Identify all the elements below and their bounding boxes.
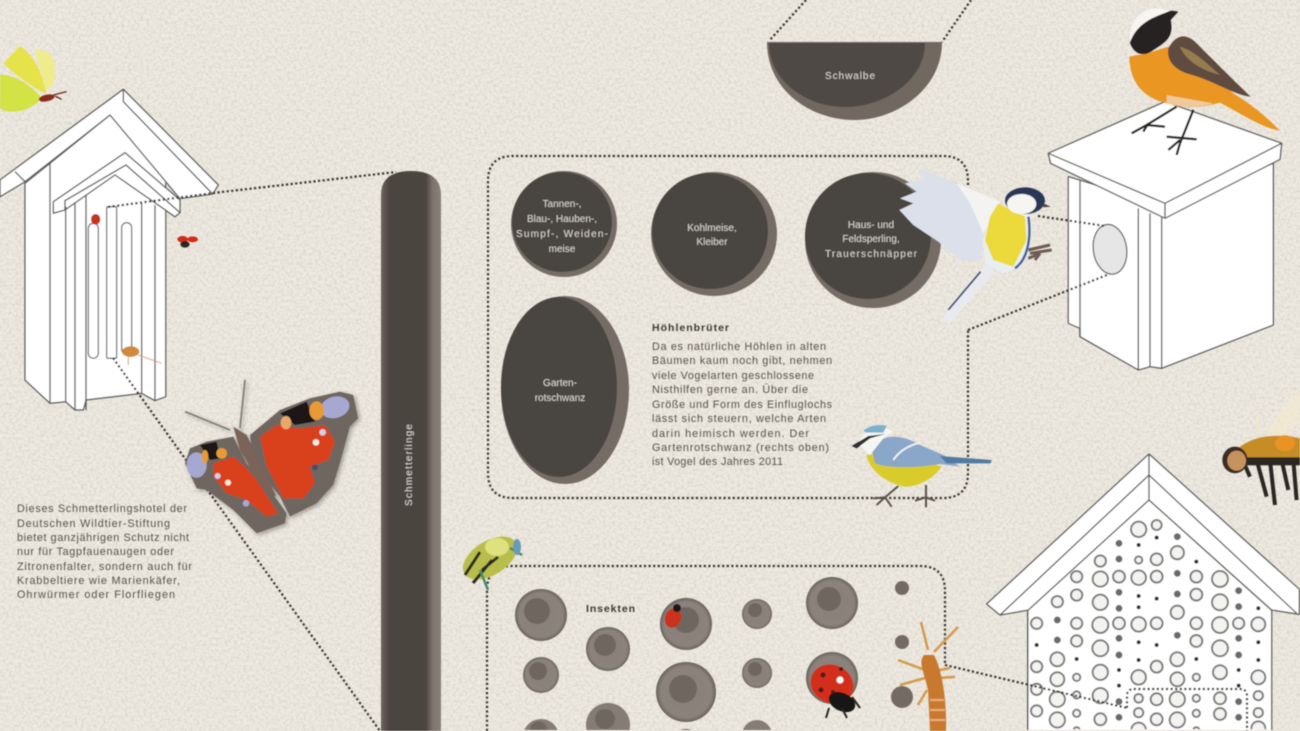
dotted inset rectangle on insect hotel: [1127, 689, 1247, 731]
text block: butterfly hotel description: nur für Tagpfauenaugen oder: [17, 546, 174, 558]
text block: Höhlenbrüter: ist Vogel des Jahres 2011: [652, 456, 783, 468]
hole: Kohlmeise: Kleiber: [696, 237, 728, 248]
label: Schmetterlinge: Schmetterlinge: [404, 424, 415, 506]
hole: Kohlmeise: Kohlmeise,: [687, 223, 737, 234]
icon: bumblebee: [1222, 392, 1300, 505]
dotted connector: nest box hole: [968, 216, 1107, 330]
hole: Tannenmeise etc: Tannen-,: [543, 199, 581, 210]
icon: great tit: [899, 168, 1052, 325]
icon: yellow wild bee: [456, 528, 524, 590]
icon: orange bug on hotel: [122, 346, 162, 365]
hole: Tannenmeise etc: Sumpf-, Weiden-: [516, 229, 608, 240]
hole: Kohlmeise: [651, 172, 777, 296]
hole: Tannenmeise etc: Blau-, Hauben-,: [527, 214, 597, 225]
text block: butterfly hotel description: Deutschen Wildtier-Stiftung: [17, 518, 170, 530]
hole: Haussperling etc: Trauerschnäpper: [825, 249, 918, 260]
icon: redstart: [1129, 8, 1280, 155]
text block: butterfly hotel description: Zitronenfalter, sondern auch für: [17, 561, 192, 573]
dotted connector: insect panel to hotel: [945, 665, 1127, 708]
text block: butterfly hotel description: Dieses Schmetterlingshotel der: [17, 503, 187, 515]
hole: Gartenrotschwanz: Garten-: [543, 378, 577, 389]
swallow nest hole: [767, 42, 942, 120]
icon: blue tit: [852, 425, 992, 507]
icon: earwig insect: [898, 622, 958, 731]
small bore dots: [1054, 533, 1242, 721]
hole: Tannenmeise etc: [511, 171, 617, 277]
hole: Gartenrotschwanz: rotschwanz: [535, 393, 585, 404]
panel: cavity nesters dotted outline: [488, 156, 968, 498]
text block: Höhlenbrüter: lässt sich steuern, welche Arten: [652, 413, 826, 425]
icon: large ladybird: [804, 657, 860, 718]
text block: butterfly hotel description: Krabbeltiere wie Marienkäfer,: [17, 575, 180, 587]
icon: small red bug on hotel: [91, 214, 100, 225]
text block: butterfly hotel description: [17, 503, 192, 601]
hole: Haussperling etc: Haus- und: [848, 220, 894, 231]
insect panel dotted outline: [487, 566, 945, 731]
icon: peacock butterfly: [185, 380, 358, 533]
hole: Tannenmeise etc: meise: [549, 244, 576, 255]
text block: butterfly hotel description: bietet ganzjährigen Schutz nicht: [17, 532, 189, 544]
dotted connector: swallow nest: [769, 0, 971, 42]
heading: Insekten: Insekten: [586, 603, 635, 615]
entrance hole: [1090, 222, 1130, 276]
text block: Höhlenbrüter: Gartenrotschwanz (rechts oben): [652, 442, 829, 454]
nest box drawing: [1048, 102, 1282, 370]
text block: Höhlenbrüter: [652, 322, 833, 468]
text block: Höhlenbrüter: Größe und Form des Einfluglochs: [652, 399, 833, 411]
text block: Höhlenbrüter: Bäumen kaum noch gibt, nehmen: [652, 355, 832, 367]
text block: Höhlenbrüter: Nisthilfen gerne an. Über die: [652, 384, 808, 396]
text block: Höhlenbrüter: Da es natürliche Höhlen in alten: [652, 341, 826, 353]
icon: ladybird flying: [177, 236, 198, 248]
text block: Höhlenbrüter: darin heimisch werden. Der: [652, 428, 809, 440]
dotted connector: butterfly hotel to slot: [108, 172, 396, 731]
bore holes: [1031, 520, 1265, 729]
text block: Höhlenbrüter: Höhlenbrüter: [652, 322, 729, 334]
insect hotel drawing: [987, 454, 1299, 730]
text block: Höhlenbrüter: viele Vogelarten geschlossene: [652, 370, 814, 382]
insect nesting holes: [515, 577, 913, 730]
icon: brimstone butterfly: [0, 46, 67, 112]
butterfly slot: vertical bar: [381, 171, 441, 731]
label: Schwalbe: Schwalbe: [825, 71, 875, 82]
text block: butterfly hotel description: Ohrwürmer oder Florfliegen: [17, 589, 175, 601]
hole: Haussperling etc: Feldsperling,: [842, 234, 900, 245]
hole: Gartenrotschwanz: [501, 296, 629, 484]
icon: small ladybird: [662, 604, 684, 630]
hole: Haussperling etc: [805, 172, 941, 308]
butterfly hotel drawing: [0, 89, 218, 410]
